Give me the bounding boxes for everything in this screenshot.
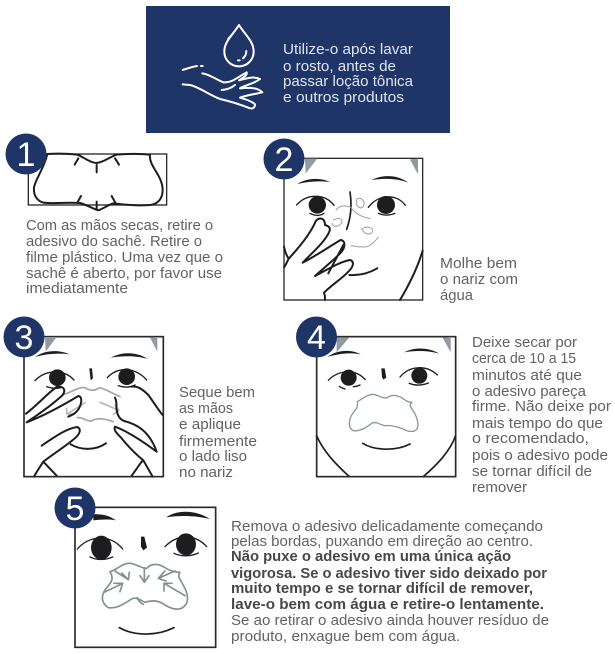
illustration: wetting the nose — [284, 158, 423, 300]
step 5 text: Se ao retirar o adesivo ainda houver resíduo de — [231, 612, 549, 629]
banner text — [283, 41, 414, 106]
step 1 text: adesivo do sachê. Retire o — [26, 233, 202, 250]
step 2 number badge — [264, 138, 304, 180]
step 3 number badge: 3 — [15, 319, 33, 357]
step 4 text: o recomendado, — [472, 430, 589, 447]
panel: step 1 — [6, 134, 223, 297]
step 3 text: Seque bem — [179, 384, 255, 401]
step 1 text — [26, 217, 223, 297]
step 3 text: as mãos — [179, 400, 233, 417]
step 5 number badge: 5 — [66, 490, 84, 528]
step 4 text: mais tempo do que — [472, 415, 603, 432]
step 5 text: Não puxe o adesivo em uma única ação — [231, 548, 511, 565]
step 1 text: sachê é aberto, por favor use — [26, 265, 222, 282]
step 5 text: muito tempo e se tornar difícil de remover, — [231, 580, 533, 597]
step 4 text: o adesivo pareça — [472, 383, 587, 400]
step 3 number badge — [4, 316, 44, 358]
step 3 text: e aplique — [179, 416, 241, 433]
step 4 text — [472, 334, 611, 496]
step 5 text: pelas bordas, puxando em direção ao centro. — [231, 533, 533, 550]
illustration: nose strip sachet — [28, 154, 167, 210]
illustration: applying the strip — [24, 337, 163, 477]
step 4 text: firme. Não deixe por — [472, 398, 611, 415]
step 3 text: no nariz — [179, 464, 233, 481]
step 5 number badge — [54, 488, 96, 528]
step 4 number badge — [296, 316, 337, 358]
step 5 text — [231, 518, 549, 645]
step 4 text: pois o adesivo pode — [472, 447, 608, 464]
step 4 number badge: 4 — [307, 319, 326, 357]
panel: step 4 — [296, 316, 611, 496]
step 5 text: Remova o adesivo delicadamente começando — [231, 518, 543, 535]
step 2 text: água — [440, 287, 474, 304]
step 5 text: lave-o bem com água e retire-o lentamente. — [231, 596, 544, 613]
step 3 text: o lado liso — [179, 448, 247, 465]
panel: usage tip banner — [146, 6, 450, 133]
step 2 text: o nariz com — [440, 271, 518, 288]
step 4 text: Deixe secar por — [472, 334, 577, 351]
step 3 text — [179, 384, 257, 481]
step 2 text: Molhe bem — [440, 255, 517, 272]
step 1 text: imediatamente — [26, 280, 128, 297]
banner text: passar loção tônica — [283, 73, 414, 90]
step 1 text: Com as mãos secas, retire o — [26, 217, 213, 234]
illustration: strip drying on nose — [317, 337, 456, 477]
illustration: removing the strip — [75, 507, 216, 647]
banner text: o rosto, antes de — [283, 58, 396, 75]
panel: step 2 — [264, 138, 518, 304]
panel: step 3 — [4, 316, 257, 481]
step 4 text: se tornar difícil de — [472, 463, 592, 480]
step 4 text: cerca de 10 a 15 — [472, 350, 576, 367]
panel: step 5 — [54, 488, 549, 647]
step 4 text: minutos até que — [472, 367, 582, 384]
step 5 text: produto, enxague bem com água. — [231, 628, 460, 645]
step 3 text: firmemente — [179, 433, 257, 450]
step 1 text: filme plástico. Uma vez que o — [26, 249, 223, 266]
step 2 number badge: 2 — [275, 141, 293, 179]
step 1 number badge: 1 — [17, 136, 35, 174]
icon: water drop over hand — [183, 25, 262, 108]
banner text: Utilize-o após lavar — [283, 41, 413, 58]
step 4 text: remover — [472, 479, 527, 496]
banner text: e outros produtos — [283, 89, 404, 106]
step 1 number badge — [6, 134, 46, 174]
step 5 text: vigorosa. Se o adesivo tiver sido deixado por — [231, 565, 547, 582]
step 2 text — [440, 255, 518, 304]
